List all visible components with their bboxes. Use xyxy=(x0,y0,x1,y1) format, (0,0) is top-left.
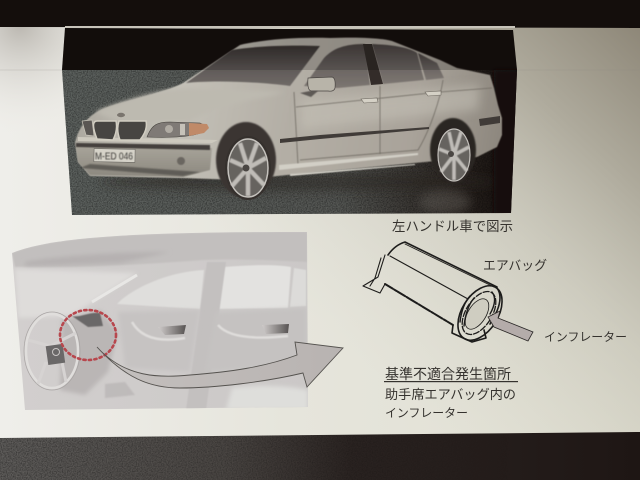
floor reflection xyxy=(419,190,471,214)
left headlight xyxy=(82,120,94,136)
label: inflator: インフレーター xyxy=(544,330,627,344)
windshield area xyxy=(15,269,137,318)
left mounting flange xyxy=(363,255,385,293)
dark shadow behind rear xyxy=(493,68,517,214)
airbag line drawing xyxy=(363,242,511,348)
airbag cylinder outline xyxy=(385,242,497,325)
wing mirror xyxy=(308,77,335,91)
label: airbag: エアバッグ xyxy=(483,258,547,273)
front bumper shadow xyxy=(76,143,210,150)
rear side window xyxy=(372,44,424,84)
front wheel xyxy=(216,122,276,200)
description text xyxy=(385,387,516,420)
door lines and handles xyxy=(294,80,492,165)
headliner xyxy=(12,232,307,267)
upper fold shadow xyxy=(55,25,525,70)
door panels xyxy=(120,313,179,368)
curved callout arrow xyxy=(97,342,343,388)
roundel xyxy=(117,113,125,117)
door handles xyxy=(162,325,186,335)
description text: インフレーター xyxy=(385,406,468,420)
car body xyxy=(75,38,502,180)
red dotted highlight circle xyxy=(60,310,116,360)
rocker highlight xyxy=(279,153,418,170)
desk surface background xyxy=(0,433,544,480)
front door glass xyxy=(117,270,204,309)
lower seat highlight xyxy=(226,386,308,410)
kidney grille xyxy=(94,121,117,140)
licence plate: M-ED 046 xyxy=(95,150,133,162)
steering wheel xyxy=(24,312,80,390)
rear door glass xyxy=(215,265,291,309)
ground shadow under car xyxy=(100,173,500,191)
description text: 助手席エアバッグ内の xyxy=(385,387,516,402)
side trim stripe xyxy=(280,127,429,143)
photo: silver sedan xyxy=(55,25,525,218)
B pillar xyxy=(363,44,383,85)
dashboard xyxy=(60,310,118,395)
front side window xyxy=(304,44,370,88)
centre pillar xyxy=(186,262,226,410)
passenger airbag cover xyxy=(72,313,103,327)
front bumper panel xyxy=(76,146,212,177)
right headlight xyxy=(147,122,208,137)
heading: non-compliance location: 基準不適合発生箇所 xyxy=(385,366,511,382)
interior cutaway illustration xyxy=(10,230,310,412)
rear wheel xyxy=(430,118,476,184)
hood highlight xyxy=(94,86,174,115)
inflator pointer arrow xyxy=(488,311,533,341)
inflator end rings xyxy=(449,278,511,348)
windshield xyxy=(186,46,320,86)
door highlight xyxy=(300,85,480,130)
caption: left-hand-drive note: 左ハンドル車で図示 xyxy=(392,219,513,234)
